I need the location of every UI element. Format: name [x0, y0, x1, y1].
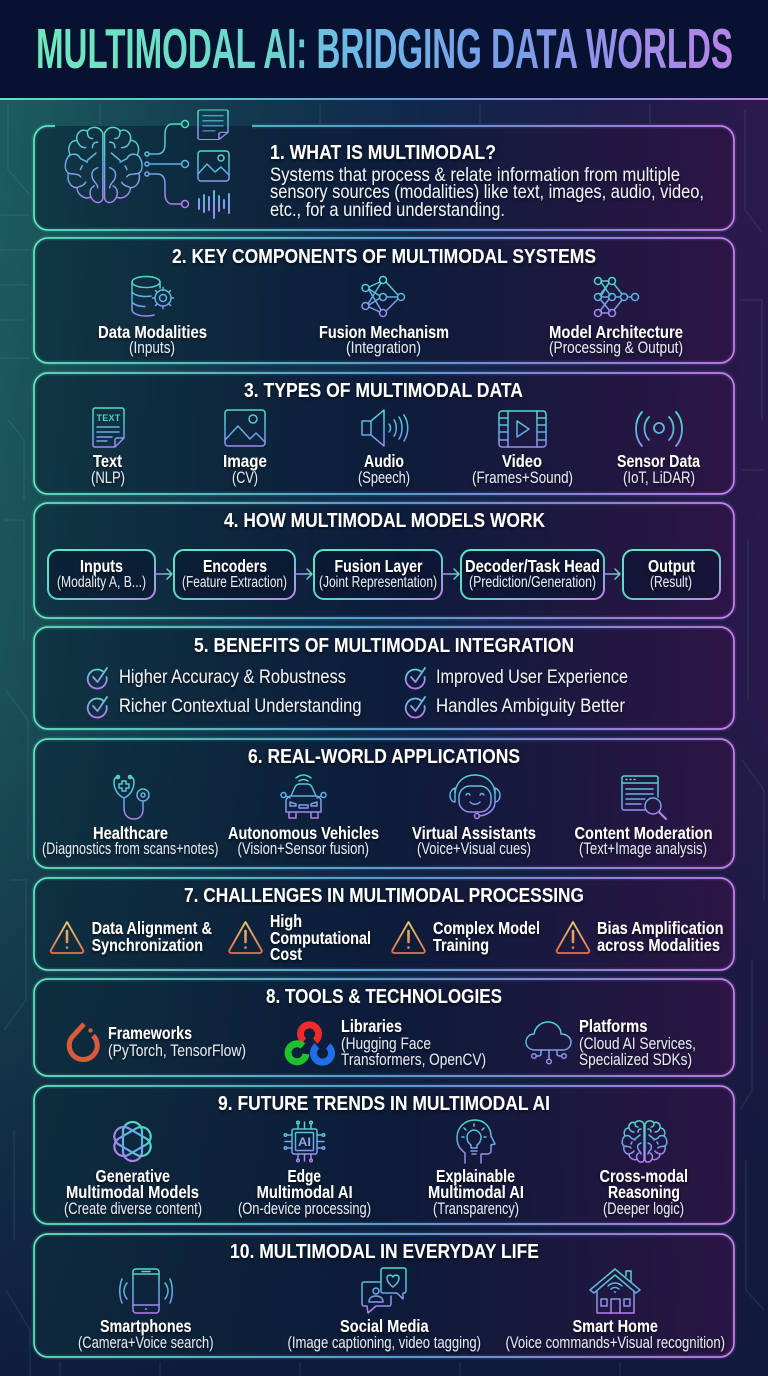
- label: audio: [358, 451, 410, 487]
- label: edge: Edge: [288, 1166, 321, 1186]
- icon: brain: [65, 127, 142, 203]
- label: explainable: Multimodal AI: [428, 1182, 524, 1202]
- libraries text: Transformers, OpenCV): [341, 1051, 486, 1069]
- step: inputs: Inputs: [80, 556, 123, 576]
- panel 1: what is multimodal: [34, 110, 734, 230]
- label: social media: Social Media: [340, 1316, 429, 1336]
- icon: warning: [557, 922, 589, 953]
- icon: warning: [51, 922, 83, 953]
- label: content moderation: Content Moderation: [574, 823, 712, 843]
- step: decoder: Decoder/Task Head: [465, 556, 600, 576]
- label: data modalities: Data Modalities: [98, 322, 207, 342]
- arrow: [604, 569, 620, 579]
- label: healthcare: Healthcare: [93, 823, 168, 843]
- heading: 2. KEY COMPONENTS OF MULTIMODAL SYSTEMS: [172, 246, 596, 268]
- label: autonomous vehicles: [228, 823, 379, 858]
- header band: [0, 0, 768, 98]
- challenge: training: Complex Model: [433, 918, 540, 938]
- icon: database gear: [132, 276, 174, 316]
- icon: smart home: [590, 1269, 640, 1313]
- label: generative: [64, 1166, 202, 1218]
- label: text: (NLP): [91, 469, 125, 487]
- challenge: compute: High: [270, 911, 302, 931]
- benefit: user experience: Improved User Experience: [436, 666, 628, 688]
- panel 2: key components: [34, 238, 734, 363]
- icon: smartphone: [120, 1269, 172, 1313]
- icon: text document: [93, 408, 124, 447]
- libraries text: Libraries: [341, 1016, 402, 1036]
- header divider line: [0, 98, 768, 100]
- icon: explainable head: [457, 1120, 495, 1163]
- panel 5: benefits: [34, 627, 734, 729]
- heading: 8. TOOLS & TECHNOLOGIES: [266, 986, 502, 1008]
- platforms text: [579, 1016, 696, 1069]
- frameworks text: Frameworks: [108, 1023, 192, 1043]
- icon: edge AI chip: [284, 1121, 325, 1162]
- icon: edge AI chip: AI: [298, 1135, 311, 1149]
- benefit: ambiguity: Handles Ambiguity Better: [436, 695, 625, 717]
- heading: 1. WHAT IS MULTIMODAL?: [270, 142, 496, 164]
- step: encoders: [174, 550, 295, 599]
- step: fusion layer: Fusion Layer: [334, 556, 423, 576]
- icon: warning: [392, 922, 425, 953]
- icon: modality connectors: [145, 120, 188, 208]
- icon: document: [198, 110, 228, 140]
- label: model architecture: [549, 322, 683, 357]
- label: cross-modal: Cross-modal: [600, 1166, 688, 1186]
- icon: generative knot: [111, 1122, 154, 1161]
- label: generative: Generative: [96, 1166, 170, 1186]
- frameworks text: (PyTorch, TensorFlow): [108, 1042, 246, 1060]
- label: cross-modal: [600, 1166, 688, 1218]
- step: fusion layer: [314, 550, 442, 599]
- label: content moderation: (Text+Image analysis): [579, 840, 707, 858]
- icon: image: [225, 410, 265, 446]
- step: output: Output: [648, 556, 695, 576]
- icon: cloud: [526, 1022, 571, 1064]
- label: smartphones: Smartphones: [100, 1316, 192, 1336]
- description text: [270, 164, 704, 221]
- panel 7: challenges: [34, 878, 734, 970]
- icon: text document: TEXT: [96, 413, 120, 424]
- label: edge: (On-device processing): [238, 1200, 371, 1218]
- challenge: bias: [597, 918, 724, 955]
- icon: stethoscope: [114, 776, 149, 819]
- challenge: alignment: [92, 918, 212, 955]
- label: smartphones: [78, 1316, 214, 1352]
- label: text: Text: [93, 451, 122, 471]
- label: audio: (Speech): [358, 469, 410, 487]
- label: explainable: Explainable: [436, 1166, 515, 1186]
- challenge: bias: across Modalities: [597, 935, 720, 955]
- step: decoder: (Prediction/Generation): [469, 574, 596, 591]
- label: virtual assistants: Virtual Assistants: [412, 823, 536, 843]
- label: image: [223, 451, 267, 487]
- label: generative: Multimodal Models: [66, 1182, 199, 1202]
- label: autonomous vehicles: (Vision+Sensor fusion): [238, 840, 369, 858]
- step: decoder: [461, 550, 604, 599]
- label: model architecture: Model Architecture: [549, 322, 683, 342]
- challenge: alignment: Data Alignment &: [92, 918, 212, 938]
- icon: warning: [229, 922, 262, 953]
- label: cross-modal: Reasoning: [608, 1182, 680, 1202]
- step: inputs: (Modality A, B...): [57, 574, 146, 591]
- heading: 3. TYPES OF MULTIMODAL DATA: [244, 380, 523, 402]
- label: image: Image: [223, 451, 267, 471]
- icon: waveform: [199, 191, 229, 218]
- label: smart home: [506, 1316, 725, 1352]
- label: video: (Frames+Sound): [472, 469, 573, 487]
- challenge: training: Training: [433, 935, 489, 955]
- label: healthcare: (Diagnostics from scans+notes): [42, 840, 218, 858]
- label: video: Video: [502, 451, 542, 471]
- panel 10: everyday life: [34, 1234, 734, 1357]
- label: cross-modal: (Deeper logic): [603, 1200, 684, 1218]
- label: explainable: [428, 1166, 524, 1218]
- label: healthcare: [42, 823, 218, 858]
- icon: reasoning brain: [622, 1121, 667, 1162]
- heading: 4. HOW MULTIMODAL MODELS WORK: [224, 510, 545, 532]
- label: fusion mechanism: [319, 322, 449, 357]
- icon: social media: [362, 1268, 406, 1313]
- step: output: [623, 550, 720, 599]
- label: data modalities: [98, 322, 207, 357]
- icon: model architecture: [594, 278, 638, 316]
- panel 3: types of data: [34, 373, 734, 494]
- label: data modalities: (Inputs): [129, 339, 175, 357]
- frameworks text: [108, 1023, 246, 1060]
- label: virtual assistants: (Voice+Visual cues): [417, 840, 531, 858]
- icon: content moderation: [622, 776, 666, 819]
- libraries text: (Hugging Face: [341, 1035, 431, 1053]
- label: fusion mechanism: (Integration): [346, 339, 421, 357]
- icon: flame logo: [69, 1024, 97, 1060]
- platforms text: Specialized SDKs): [579, 1051, 692, 1069]
- label: edge: Multimodal AI: [257, 1182, 353, 1202]
- icon: fusion network: [362, 276, 404, 316]
- challenge: alignment: Synchronization: [92, 935, 203, 955]
- step: output: (Result): [650, 574, 692, 591]
- icon: sensor signal: [636, 412, 682, 446]
- label: sensor data: [617, 451, 700, 487]
- label: smart home: Smart Home: [572, 1316, 658, 1336]
- step: encoders: (Feature Extraction): [182, 574, 287, 591]
- panel 8: tools: [34, 979, 734, 1076]
- arrow: [295, 569, 312, 579]
- panel 9: future trends: [34, 1086, 734, 1224]
- heading: 5. BENEFITS OF MULTIMODAL INTEGRATION: [194, 635, 574, 657]
- label: content moderation: [574, 823, 712, 858]
- label: video: [472, 451, 573, 487]
- heading: 9. FUTURE TRENDS IN MULTIMODAL AI: [218, 1093, 550, 1115]
- label: generative: (Create diverse content): [64, 1200, 202, 1218]
- challenge: compute: [270, 911, 371, 964]
- icon: speaker: [362, 410, 408, 446]
- challenge: training: [433, 918, 540, 955]
- label: audio: Audio: [364, 451, 404, 471]
- label: social media: [288, 1316, 481, 1352]
- heading: 7. CHALLENGES IN MULTIMODAL PROCESSING: [184, 885, 584, 907]
- panel 4: how models work: [34, 503, 734, 618]
- step: inputs: [48, 550, 155, 599]
- step: fusion layer: (Joint Representation): [319, 574, 437, 591]
- label: social media: (Image captioning, video tagging): [288, 1334, 481, 1352]
- benefit: context: Richer Contextual Understanding: [119, 695, 362, 717]
- benefit: accuracy: Higher Accuracy & Robustness: [119, 666, 346, 688]
- panel 6: applications: [34, 739, 734, 868]
- step: encoders: Encoders: [203, 556, 267, 576]
- label: text: [91, 451, 125, 487]
- arrow: [155, 569, 172, 579]
- label: edge: [238, 1166, 371, 1218]
- libraries text: [341, 1016, 486, 1069]
- icon: video frames: [499, 411, 546, 447]
- label: sensor data: Sensor Data: [617, 451, 700, 471]
- label: sensor data: (IoT, LiDAR): [623, 469, 695, 487]
- label: fusion mechanism: Fusion Mechanism: [319, 322, 449, 342]
- label: autonomous vehicles: Autonomous Vehicles: [228, 823, 379, 843]
- icon: virtual assistant: [450, 775, 500, 818]
- description text: etc., for a unified understanding.: [270, 199, 505, 221]
- challenge: compute: Computational: [270, 928, 371, 948]
- challenge: bias: Bias Amplification: [597, 918, 724, 938]
- challenge: compute: Cost: [270, 944, 302, 964]
- arrow: [442, 569, 459, 579]
- heading: 10. MULTIMODAL IN EVERYDAY LIFE: [230, 1241, 539, 1263]
- label: smartphones: (Camera+Voice search): [78, 1334, 214, 1352]
- platforms text: (Cloud AI Services,: [579, 1035, 696, 1053]
- platforms text: Platforms: [579, 1016, 648, 1036]
- icon: image: [198, 151, 229, 181]
- label: image: (CV): [232, 469, 258, 487]
- label: virtual assistants: [412, 823, 536, 858]
- icon: rings logo: [288, 1025, 332, 1062]
- heading: 6. REAL-WORLD APPLICATIONS: [248, 746, 520, 768]
- label: model architecture: (Processing & Output): [549, 339, 683, 357]
- icon: connected car: [281, 775, 326, 818]
- description text: Systems that process & relate information from multiple: [270, 164, 680, 186]
- label: explainable: (Transparency): [433, 1200, 519, 1218]
